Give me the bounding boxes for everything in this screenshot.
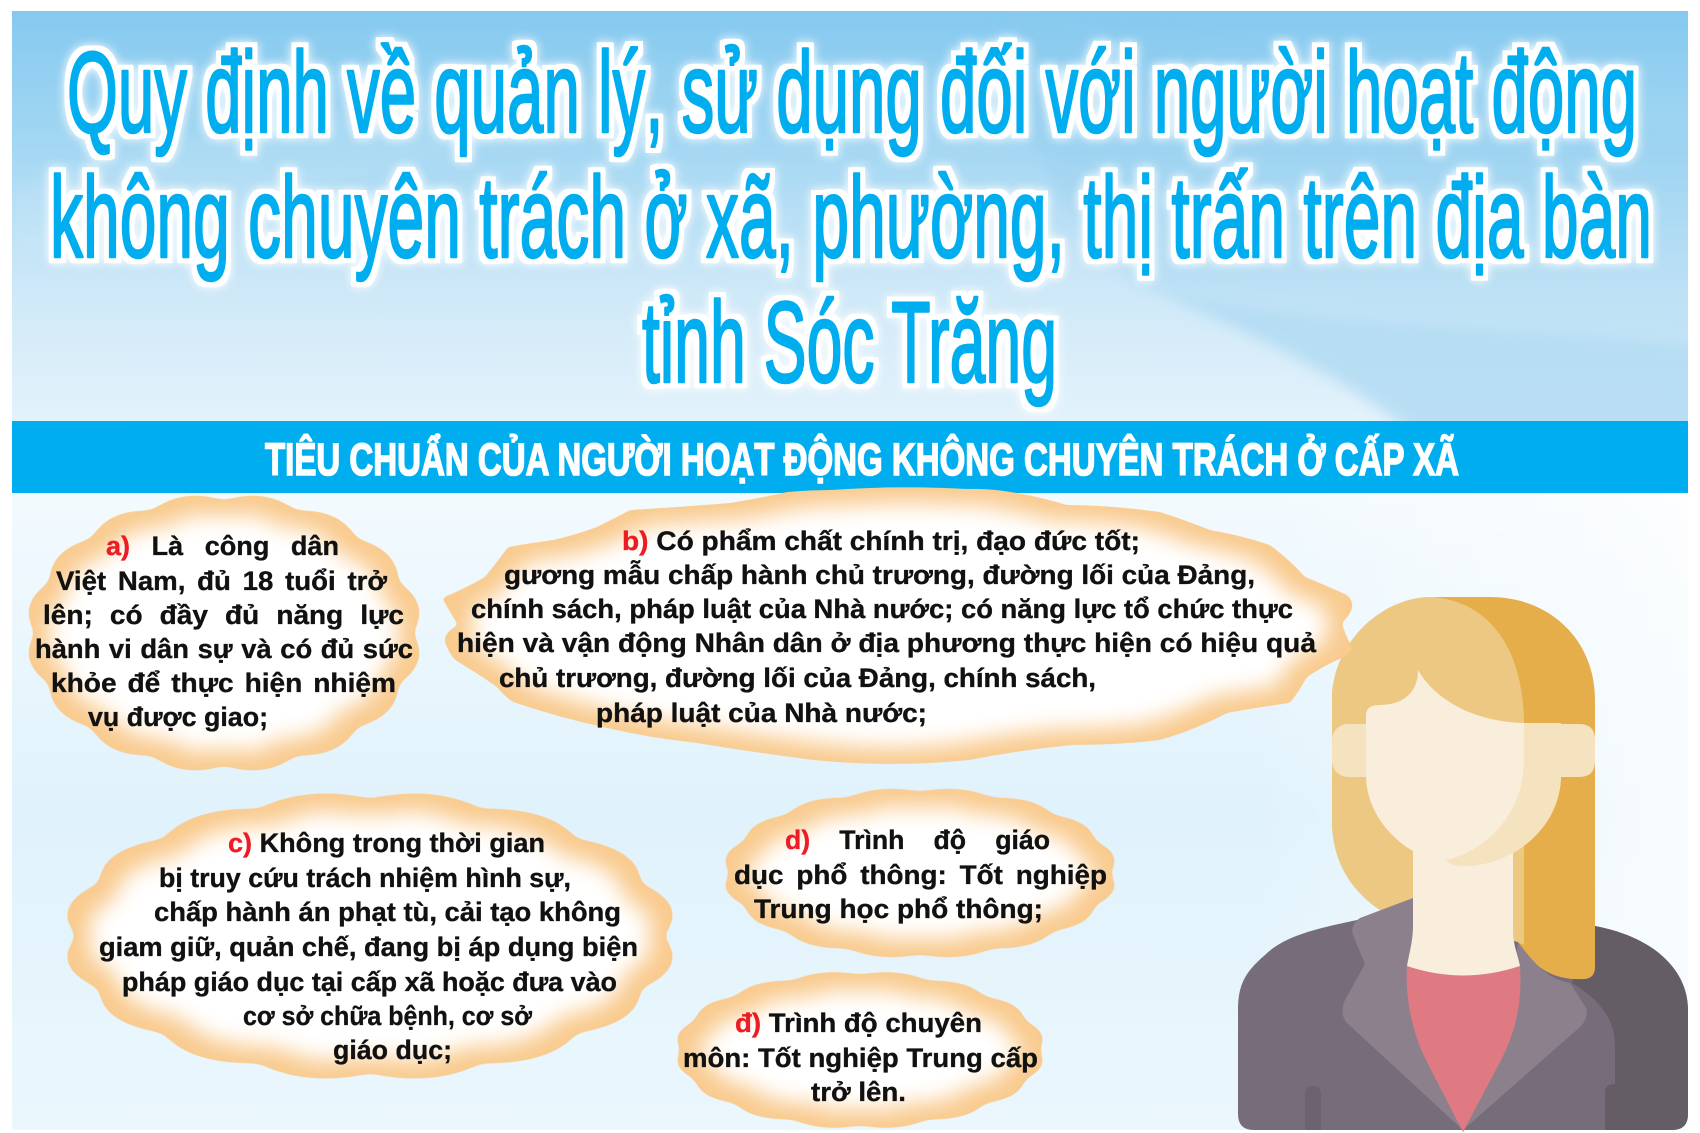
text c: bị truy cứu trách nhiệm hình sự, — [159, 863, 571, 893]
icon: sleeve seam — [1305, 1086, 1321, 1130]
text đ — [683, 1008, 1038, 1107]
title: tỉnh Sóc Trăng — [642, 279, 1057, 407]
panel: criterion b — [442, 487, 1353, 764]
icon: neck — [1407, 830, 1520, 976]
text d: Trung học phổ thông; — [754, 894, 1043, 924]
text a: lên; có đầy đủ năng lực — [43, 600, 404, 630]
text đ: đ) Trình độ chuyên — [735, 1008, 982, 1038]
title — [50, 29, 1652, 407]
text a: Việt Nam, đủ 18 tuổi trở — [56, 566, 388, 596]
text c: giáo dục; — [333, 1035, 452, 1065]
bubble c — [68, 795, 672, 1077]
text c: c) Không trong thời gian — [228, 828, 545, 858]
panel: criterion đ — [677, 974, 1043, 1126]
section heading band — [12, 421, 1688, 493]
icon: shirt — [1407, 966, 1520, 1132]
icon: jacket shaded side — [1572, 926, 1688, 1130]
text c: pháp giáo dục tại cấp xã hoặc đưa vào — [122, 967, 617, 997]
icon: face shade — [1446, 723, 1561, 866]
text b: b) Có phẩm chất chính trị, đạo đức tốt; — [622, 526, 1140, 556]
text đ: môn: Tốt nghiệp Trung cấp — [683, 1043, 1038, 1073]
bubble b — [442, 487, 1353, 764]
text đ: trở lên. — [811, 1077, 906, 1107]
icon: back hair dark — [1332, 597, 1595, 979]
text d: dục phổ thông: Tốt nghiệp — [734, 860, 1107, 890]
icon: front hair light — [1332, 597, 1524, 945]
bubble đ — [677, 974, 1043, 1126]
icon: right ear — [1524, 724, 1595, 777]
text c — [99, 828, 638, 1065]
icon: lapel left — [1342, 898, 1463, 1130]
panel: header background — [12, 0, 1700, 440]
text a: hành vi dân sự và có đủ sức — [35, 634, 413, 664]
text b: hiện và vận động Nhân dân ở địa phương thực hiện có hiệu quả — [457, 628, 1317, 658]
icon: jacket — [1238, 880, 1688, 1130]
text b: pháp luật của Nhà nước; — [596, 698, 927, 728]
text a: khỏe để thực hiện nhiệm — [51, 668, 396, 698]
text b — [457, 526, 1317, 728]
panel: criterion a — [30, 497, 418, 769]
panel: criterion c — [68, 795, 672, 1077]
text c: cơ sở chữa bệnh, cơ sở — [243, 1001, 533, 1031]
panel: criterion d — [726, 790, 1114, 956]
panel: lower background — [12, 493, 1688, 1130]
text a: a) Là công dân — [106, 531, 339, 561]
text a: vụ được giao; — [88, 702, 268, 732]
bubble d — [726, 790, 1114, 956]
bubble a — [30, 497, 418, 769]
text d — [734, 825, 1107, 924]
text d: d) Trình độ giáo — [785, 825, 1050, 855]
text b: chính sách, pháp luật của Nhà nước; có năng lực tổ chức thực — [471, 594, 1293, 624]
text b: gương mẫu chấp hành chủ trương, đường lối của Đảng, — [504, 559, 1255, 590]
icon: face — [1366, 670, 1561, 866]
icon: left ear — [1332, 724, 1382, 777]
text a — [35, 531, 413, 732]
text c: giam giữ, quản chế, đang bị áp dụng biện — [99, 932, 638, 962]
text b: chủ trương, đường lối của Đảng, chính sách, — [499, 663, 1096, 693]
illustration: faceless woman in blazer — [1238, 597, 1688, 1132]
text c: chấp hành án phạt tù, cải tạo không — [154, 897, 621, 927]
icon: lapel right — [1463, 942, 1587, 1130]
